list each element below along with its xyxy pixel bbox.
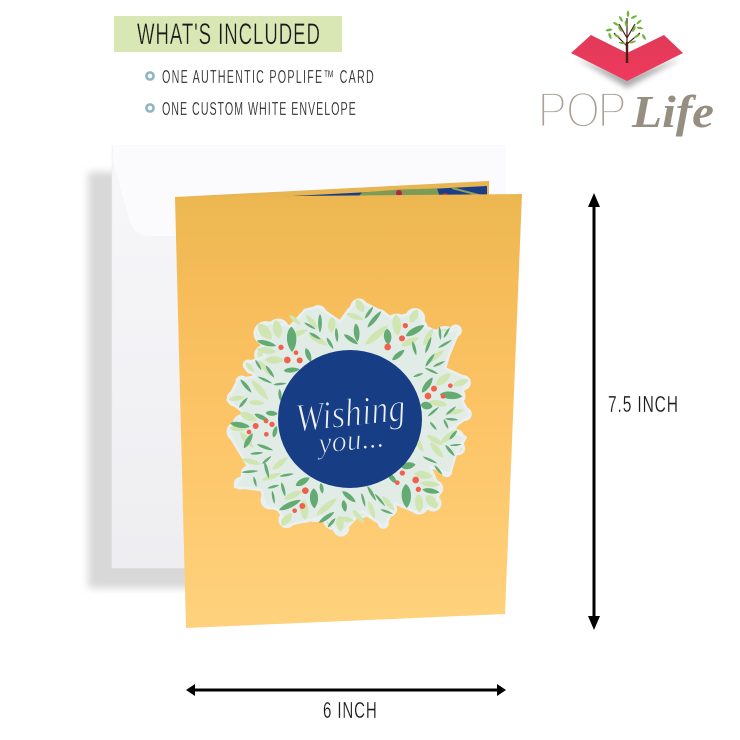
script greeting: you... (314, 421, 386, 461)
title banner: WHAT'S INCLUDED (137, 18, 320, 51)
navy circle (278, 350, 422, 488)
height arrow (588, 193, 600, 630)
wreath (228, 298, 470, 535)
wreath: green leaves (230, 306, 463, 528)
card: inner back panel (175, 181, 489, 198)
wreath: light leaves (228, 298, 470, 532)
item: white envelope: ONE CUSTOM WHITE ENVELOPE (162, 99, 356, 120)
card: inner pop-up peek (273, 186, 487, 199)
width arrow (186, 684, 506, 696)
logo: tree (605, 10, 647, 63)
poplife logo (538, 10, 714, 138)
logo: POP wordmark: POP (538, 81, 627, 138)
item: poplife card: ONE AUTHENTIC POPLIFE™ CARD (162, 67, 374, 88)
envelope flap (113, 146, 505, 236)
wreath: paper base (228, 300, 470, 535)
logo: book shadow (576, 58, 682, 88)
envelope (88, 146, 505, 588)
width label: 6 INCH (323, 698, 377, 724)
script greeting (293, 384, 407, 461)
envelope body (112, 146, 505, 568)
included items list (146, 67, 374, 120)
logo: red open book (571, 35, 683, 81)
wreath: red berries (247, 323, 453, 513)
greeting card (175, 181, 522, 628)
height label: 7.5 INCH (608, 392, 678, 418)
logo: Life wordmark: Life (631, 86, 714, 137)
card: front cover (175, 194, 522, 628)
script greeting: Wishing (293, 384, 407, 441)
envelope shadow (88, 172, 198, 588)
